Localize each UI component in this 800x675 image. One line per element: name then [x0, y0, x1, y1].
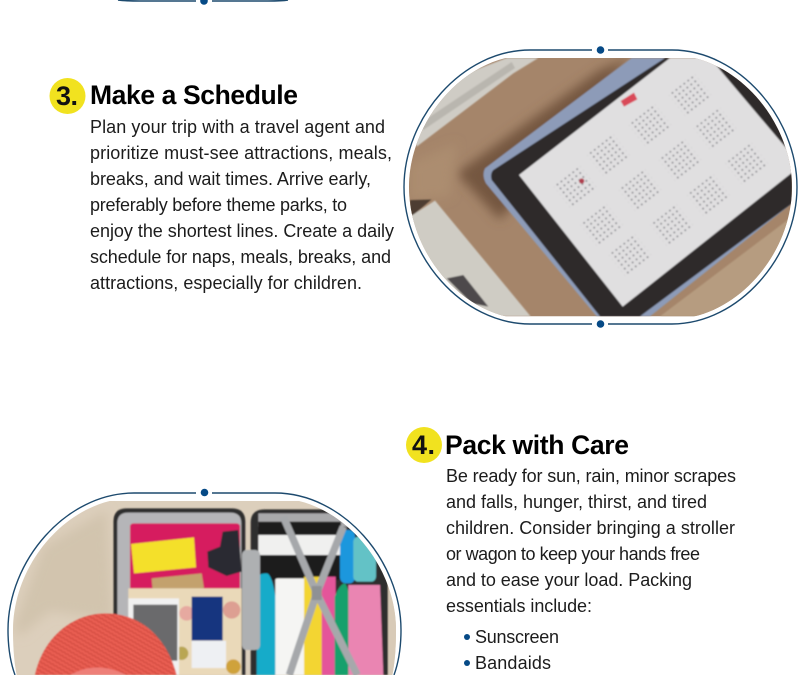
- body text: schedule advice: preferably before theme parks, to: [90, 195, 347, 215]
- section 4: pack with care: [0, 427, 736, 675]
- body text: schedule advice: [90, 117, 394, 293]
- body text: packing advice: or wagon to keep your hands free: [446, 544, 700, 564]
- bullet list: packing essentials: Sunscreen: [475, 627, 559, 647]
- photo: tablet calendar on a desk: [400, 58, 800, 316]
- body text: packing advice: essentials include:: [446, 596, 592, 616]
- step number badge 3: [50, 78, 86, 114]
- bullet list: packing essentials: [464, 627, 559, 673]
- body text: packing advice: children. Consider bringing a stroller: [446, 518, 735, 538]
- oval frame with two dots: [404, 46, 797, 328]
- oval frame with top dot: [8, 489, 401, 675]
- body text: packing advice: and to ease your load. Packing: [446, 570, 692, 590]
- step number badge 3: 3.: [56, 81, 78, 111]
- body text: schedule advice: enjoy the shortest lines. Create a daily: [90, 221, 394, 241]
- step number badge 4: [406, 427, 442, 463]
- heading: pack with care: Pack with Care: [445, 430, 629, 460]
- body text: packing advice: [446, 466, 736, 616]
- body text: schedule advice: schedule for naps, meals, breaks, and: [90, 247, 391, 267]
- body text: packing advice: and falls, hunger, thirst, and tired: [446, 492, 707, 512]
- section 3: make a schedule: [50, 46, 800, 328]
- body text: packing advice: Be ready for sun, rain, minor scrapes: [446, 466, 736, 486]
- body text: schedule advice: Plan your trip with a travel agent and: [90, 117, 385, 137]
- body text: schedule advice: breaks, and wait times. Arrive early,: [90, 169, 371, 189]
- body text: schedule advice: prioritize must-see attractions, meals,: [90, 143, 392, 163]
- heading: make a schedule: Make a Schedule: [90, 80, 298, 110]
- photo: packed suitcase and red hat: [0, 500, 410, 675]
- step number badge 4: 4.: [412, 430, 435, 460]
- body text: schedule advice: attractions, especially for children.: [90, 273, 362, 293]
- previous section oval frame bottom edge: [118, 0, 288, 5]
- bullet list: packing essentials: Bandaids: [475, 653, 551, 673]
